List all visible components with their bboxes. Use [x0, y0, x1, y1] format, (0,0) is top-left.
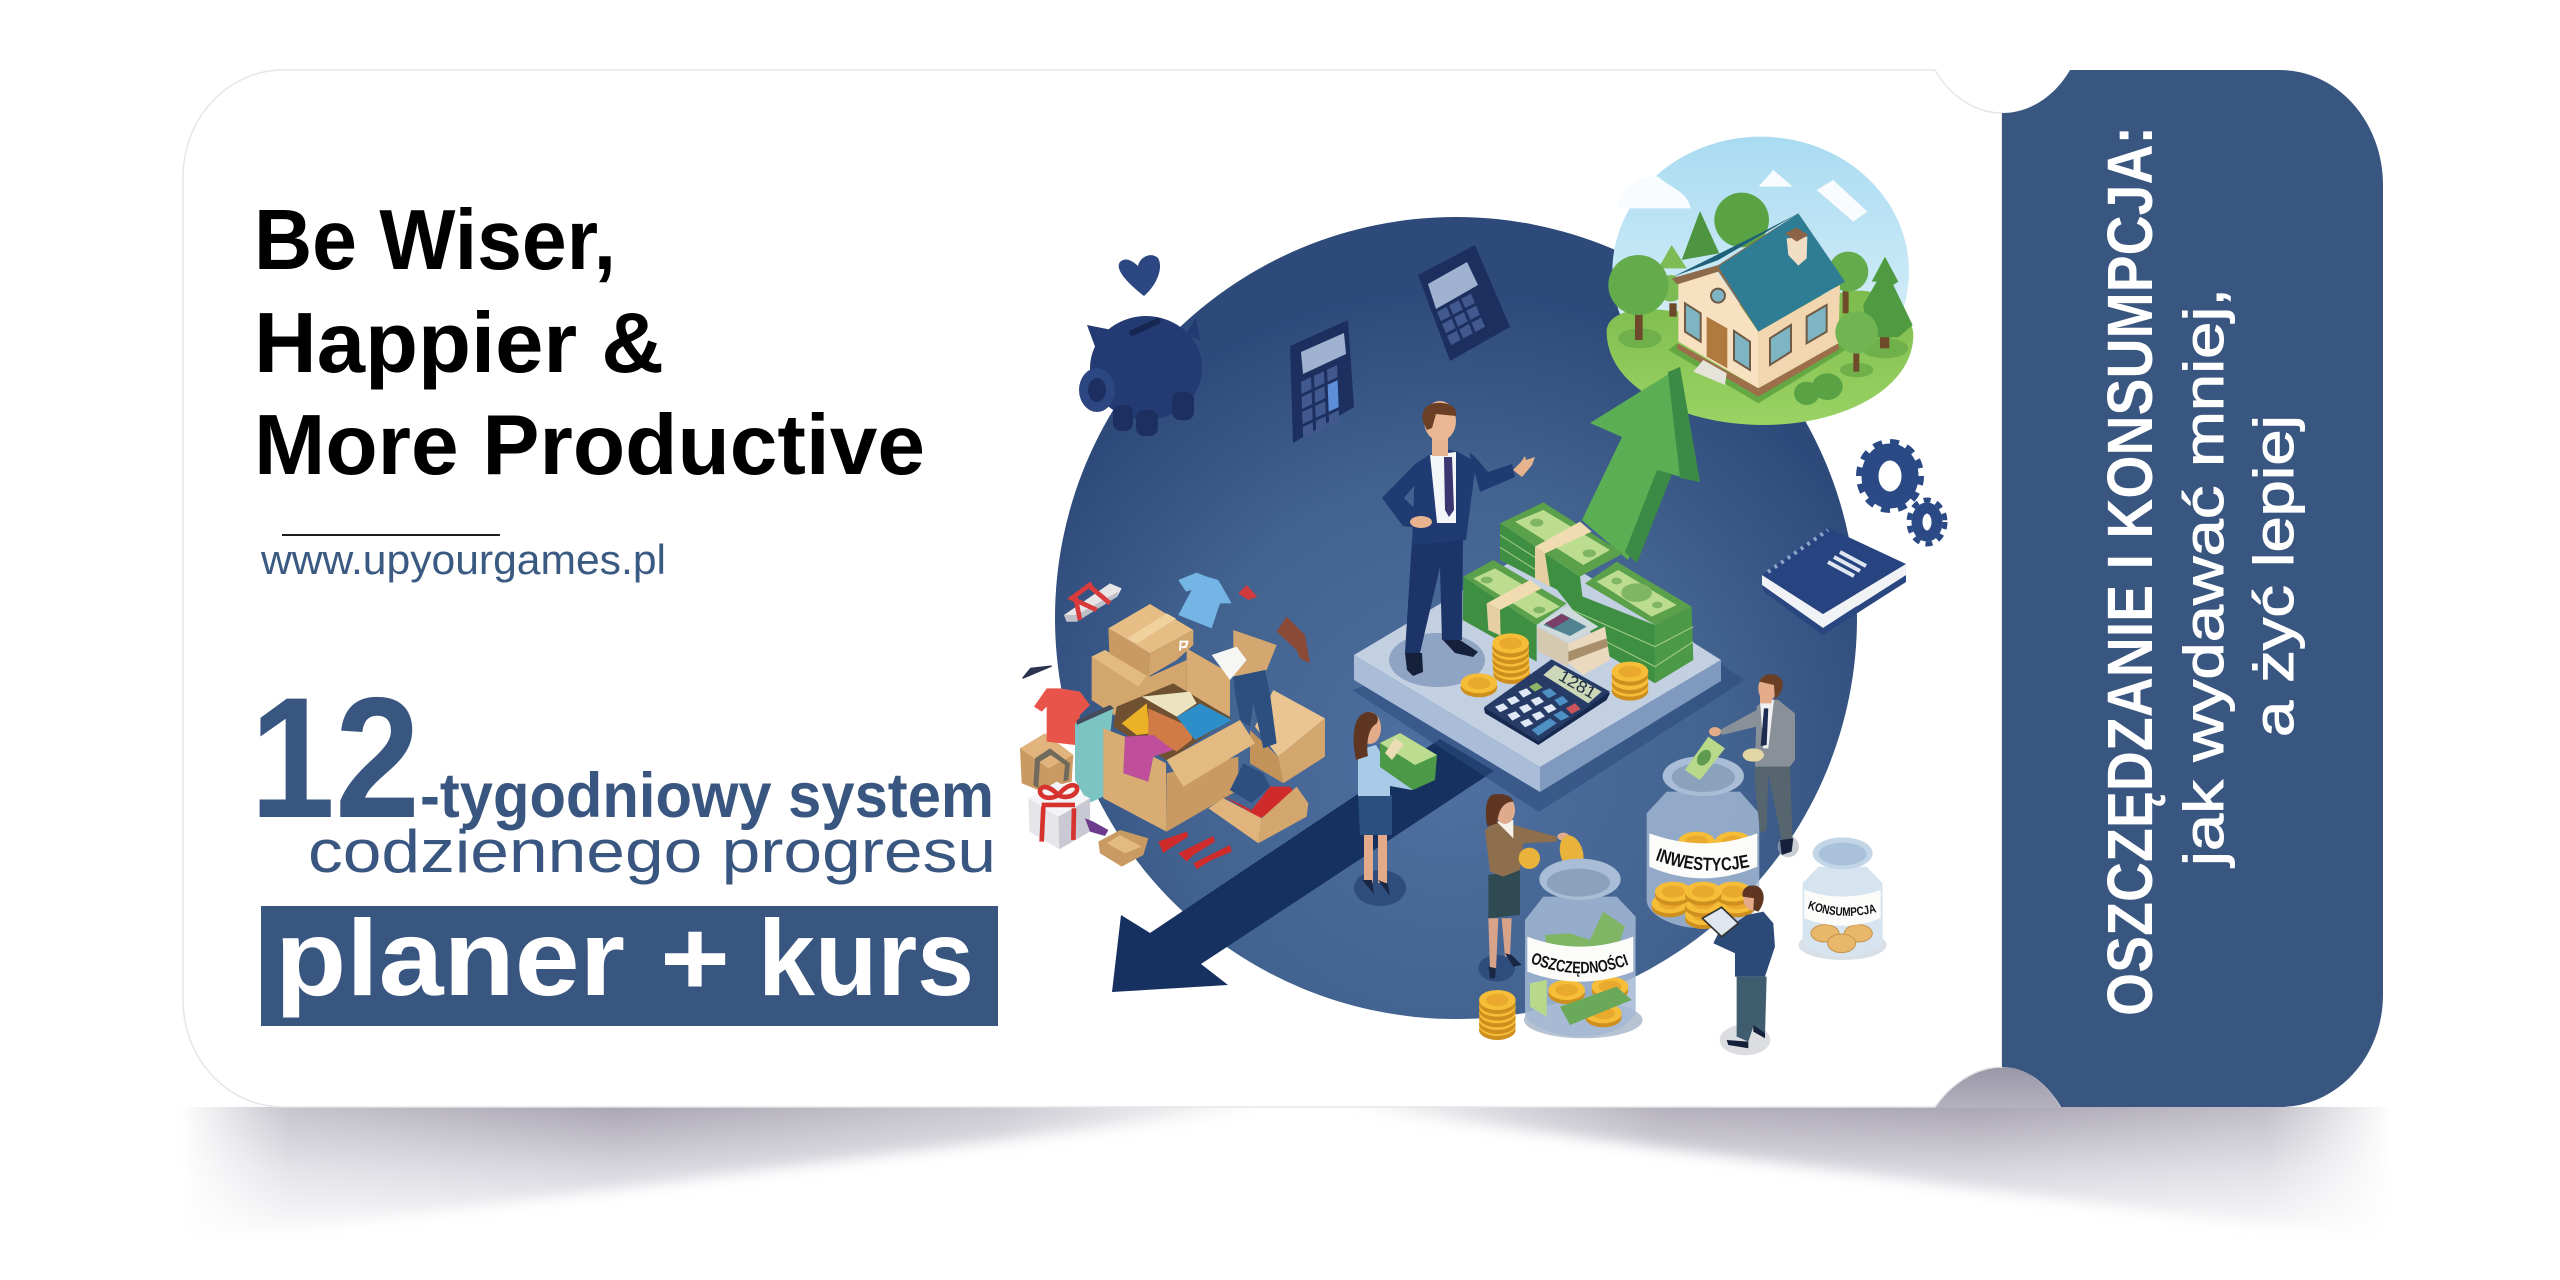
- little box: [1098, 830, 1148, 867]
- icon: wallet: [1277, 617, 1310, 663]
- tagline: 12-week system: [250, 662, 996, 885]
- purple shoe: [1085, 818, 1108, 836]
- money stack right: [1553, 562, 1693, 683]
- website link with rule: www.upyourgames.pl: [260, 536, 666, 583]
- open box back: [1187, 630, 1277, 717]
- title: Be Wiser,: [254, 193, 616, 288]
- side tab heading: OSZCZĘDZANIE I KONSUMPCJA:: [2094, 126, 2166, 1016]
- money stack back: [1500, 502, 1623, 603]
- title: [254, 193, 925, 493]
- figure: man in gray suit: [1685, 674, 1799, 857]
- red shirt: [1034, 688, 1090, 745]
- jar: Inwestycje: [1646, 756, 1760, 929]
- banner: planer + kurs: +: [660, 897, 730, 1018]
- jar: Inwestycje: INWESTYCJE: [1656, 848, 1750, 871]
- icon: calculator on platform: 1281: [1555, 666, 1599, 703]
- icon: hanger: [1023, 666, 1052, 678]
- icon: red tag: [1238, 585, 1257, 600]
- icon: calculator left: [1290, 320, 1354, 443]
- figure: woman with money: [1354, 712, 1437, 906]
- side tab heading: [2094, 126, 2305, 1016]
- figure: man with tablet: [1702, 885, 1775, 1055]
- side tab heading: jak wydawać mniej,: [2172, 288, 2235, 868]
- figure: woman dropping coin: [1478, 794, 1587, 982]
- trees in front of house: [1794, 311, 1878, 405]
- platform: [1352, 545, 1745, 812]
- icon: calculator on platform: [1484, 659, 1610, 745]
- banner: planer + kurs: [261, 897, 998, 1026]
- jar: Konsumpcja: KONSUMPCJA: [1808, 900, 1876, 916]
- icon: piggy bank: [1079, 255, 1202, 436]
- money and coins on platform: [1461, 502, 1693, 745]
- jars and people: [1478, 674, 1886, 1056]
- banner: planer + kurs: kurs: [758, 897, 974, 1018]
- jar: Konsumpcja: [1798, 837, 1886, 960]
- illustration: [1020, 136, 1948, 1056]
- figure: presenter man: [1382, 401, 1535, 676]
- jar: Oszczędności: OSZCZĘDNOŚCI: [1532, 953, 1628, 977]
- jeans: [1233, 670, 1277, 748]
- main open box: [1103, 683, 1255, 832]
- top box: [1108, 604, 1193, 677]
- icon: gears: [1859, 442, 1945, 544]
- second box: [1092, 650, 1187, 717]
- icon: down arrow: [1112, 739, 1494, 992]
- clouds: [1617, 170, 1867, 222]
- title: More Productive: [254, 398, 925, 493]
- jar: Oszczędności: [1524, 858, 1643, 1038]
- icon: notebook: [1762, 528, 1906, 635]
- box left: [1020, 733, 1073, 790]
- card drop shadow: [196, 1107, 2376, 1222]
- banner: planer + kurs: planer: [275, 897, 625, 1018]
- boxes and clutter: [1020, 573, 1325, 869]
- coin stack by jar: [1479, 990, 1516, 1040]
- red shoes: [1158, 832, 1232, 869]
- tagline: 12-week system: 12: [250, 662, 420, 854]
- title: Happier &: [254, 296, 664, 391]
- tagline: 12-week system: codziennego progresu: [308, 818, 996, 885]
- low red box: [1208, 763, 1308, 843]
- side tab heading: a żyć lepiej: [2242, 415, 2305, 737]
- right box: [1250, 690, 1325, 783]
- teal bag: [1075, 705, 1114, 803]
- panel: white card: [183, 70, 2002, 1107]
- white gift: [1028, 782, 1090, 849]
- blue background disc: [1055, 217, 1857, 1019]
- money stack front: [1463, 560, 1567, 662]
- coin stacks: [1461, 633, 1648, 701]
- icon: blue shirt: [1178, 573, 1232, 628]
- icon: green growth arrow: [1582, 367, 1700, 563]
- house in bubble: [1607, 137, 1913, 425]
- icon: small gift: [1064, 583, 1122, 622]
- trees behind house: [1608, 193, 1913, 358]
- bottom ticket notch: [1935, 1067, 2061, 1108]
- small banknote bundle: [1537, 607, 1610, 675]
- tagline: 12-week system: -tygodniowy system: [420, 761, 994, 831]
- icon: calculator right: [1418, 245, 1510, 361]
- panel: blue side tab: [2002, 70, 2383, 1107]
